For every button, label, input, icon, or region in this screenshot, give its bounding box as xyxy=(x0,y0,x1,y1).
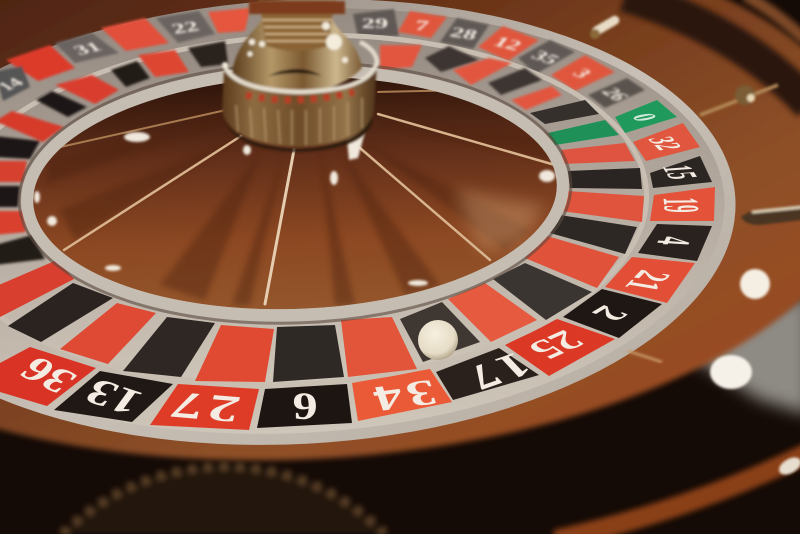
numbers, front: 17 xyxy=(451,345,541,398)
hub dome xyxy=(232,18,362,92)
wooden cone surface xyxy=(29,68,561,318)
numbers, front: 21 xyxy=(615,267,682,294)
hub flange top xyxy=(249,1,345,14)
numbers, rear: 28 xyxy=(447,24,480,43)
hub dark reflection xyxy=(268,69,322,76)
lower right wooden arc xyxy=(555,452,800,534)
numbers, front: 19 xyxy=(651,197,709,213)
pocket inner shadow xyxy=(15,53,575,333)
upper right bowl highlight xyxy=(745,0,800,40)
rod at wheel edge xyxy=(628,351,662,362)
numbers, front: 13 xyxy=(76,371,151,423)
numbers, rear: 7 xyxy=(413,17,431,34)
numbers, front: 2 xyxy=(581,301,638,325)
turret pin upper xyxy=(590,14,621,39)
white bowl stud xyxy=(740,269,770,299)
hub red band xyxy=(246,92,354,100)
table reflection xyxy=(680,290,800,415)
hub highlights xyxy=(222,22,348,68)
numbers, rear xyxy=(0,15,634,103)
glossy reflection on cone xyxy=(455,190,545,250)
middle divider ring xyxy=(0,18,656,402)
numbers, front: 27 xyxy=(162,383,245,430)
numbers, rear: 12 xyxy=(489,33,526,54)
numbers, front: 6 xyxy=(292,385,318,429)
bright table light xyxy=(710,355,752,389)
numbers, front: 25 xyxy=(519,325,594,365)
ball xyxy=(418,320,458,360)
numbers, rear: 35 xyxy=(526,47,565,67)
silver inner ring xyxy=(23,62,567,324)
numbers, rear: 3 xyxy=(567,66,598,81)
dark upper right band xyxy=(625,0,800,105)
numbers, front: 34 xyxy=(363,372,442,419)
hub neck xyxy=(258,0,336,51)
number ring cells, front xyxy=(0,100,715,430)
cone studs xyxy=(34,132,555,286)
numbers, front: 32 xyxy=(640,135,690,152)
numbers, rear: 26 xyxy=(595,86,634,103)
bullet shaped pin xyxy=(741,205,800,225)
ball pocket cells, rear and blurred xyxy=(0,41,562,265)
lower right highlight xyxy=(776,454,800,478)
numbers, front: 36 xyxy=(10,350,86,401)
hub neck rings xyxy=(262,20,332,41)
hub pleats xyxy=(236,98,362,145)
cone dividers xyxy=(56,90,555,304)
hub collar ring xyxy=(224,42,377,92)
numbers, rear: 22 xyxy=(169,18,202,37)
numbers, front: 0 xyxy=(624,111,666,124)
pocket ring base xyxy=(0,18,656,402)
rim base xyxy=(0,0,736,455)
numbers, rear: 29 xyxy=(362,15,388,32)
turret pin right with rod xyxy=(700,85,778,115)
numbers, front: 15 xyxy=(653,164,707,181)
hub base xyxy=(222,62,377,147)
numbers, rear: 31 xyxy=(69,39,106,58)
beaded base ring xyxy=(62,466,385,534)
brass hub xyxy=(222,0,377,152)
numbers, front xyxy=(10,111,709,430)
number ring cells, rear and blurred xyxy=(0,8,645,108)
hub contact shadow xyxy=(226,116,372,152)
wood grain streaks xyxy=(45,120,550,305)
ball pocket cells, front xyxy=(0,100,644,382)
numbers, front: 4 xyxy=(646,235,703,247)
